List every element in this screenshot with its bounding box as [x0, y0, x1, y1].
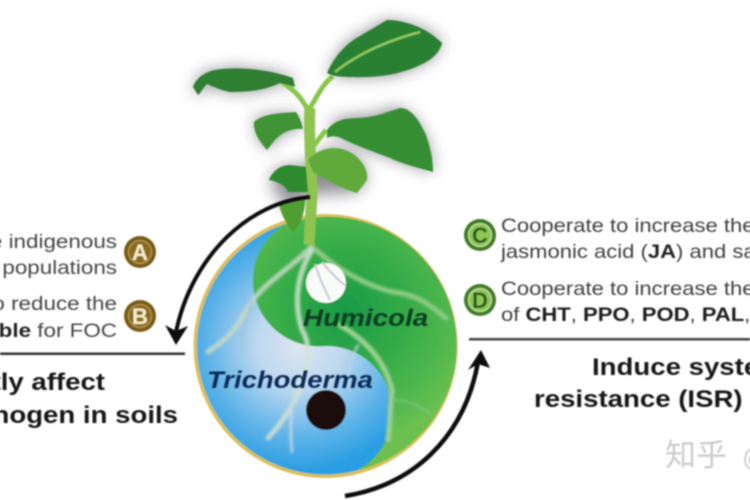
plant shadow: [193, 20, 442, 210]
badge B: [124, 300, 156, 332]
globe rim: [194, 214, 458, 478]
left leaf: [193, 68, 295, 95]
right middle leaf: [327, 108, 433, 172]
top right leaf vein: [335, 32, 420, 72]
root lines on white dot: [315, 262, 345, 300]
arrows: [165, 197, 490, 496]
Humicola green half: [253, 217, 457, 470]
heading: directly affect pathogen: [0, 370, 178, 429]
heading: induce systemic resistance: [534, 355, 750, 413]
badge A: [124, 236, 156, 268]
lower centre leaf: [308, 148, 367, 193]
lower left leaf: [269, 165, 308, 192]
top right leaf: [327, 20, 442, 77]
badge D: [464, 284, 496, 316]
right divider: [469, 338, 750, 340]
badge D: D: [472, 288, 488, 313]
label: Humicola: Humicola: [303, 304, 428, 332]
text: effect C: [500, 215, 750, 263]
Trichoderma blue half: [197, 218, 454, 474]
plant: [193, 20, 442, 245]
stem: [309, 108, 312, 245]
white dot: [306, 263, 346, 303]
branches: [278, 76, 333, 148]
badge C: [464, 219, 496, 251]
left divider: [0, 352, 185, 355]
left middle leaf: [254, 112, 303, 150]
watermark: 知乎: [665, 430, 727, 475]
hanging leaf: [279, 198, 305, 232]
badge B: B: [132, 304, 148, 329]
soil globe: [194, 214, 458, 478]
roots: [208, 246, 446, 452]
text: effect D: [501, 278, 750, 326]
left panel: [0, 231, 185, 429]
badge A: A: [132, 240, 148, 265]
species labels: [207, 304, 428, 394]
badge C: C: [472, 223, 488, 248]
arrow: to induced resistance: [345, 350, 490, 496]
right panel: [464, 215, 750, 413]
text: effect A: [0, 231, 117, 279]
black dot: [306, 390, 346, 430]
arrow: to direct effects: [165, 197, 310, 345]
label: Trichoderma: Trichoderma: [207, 368, 373, 394]
